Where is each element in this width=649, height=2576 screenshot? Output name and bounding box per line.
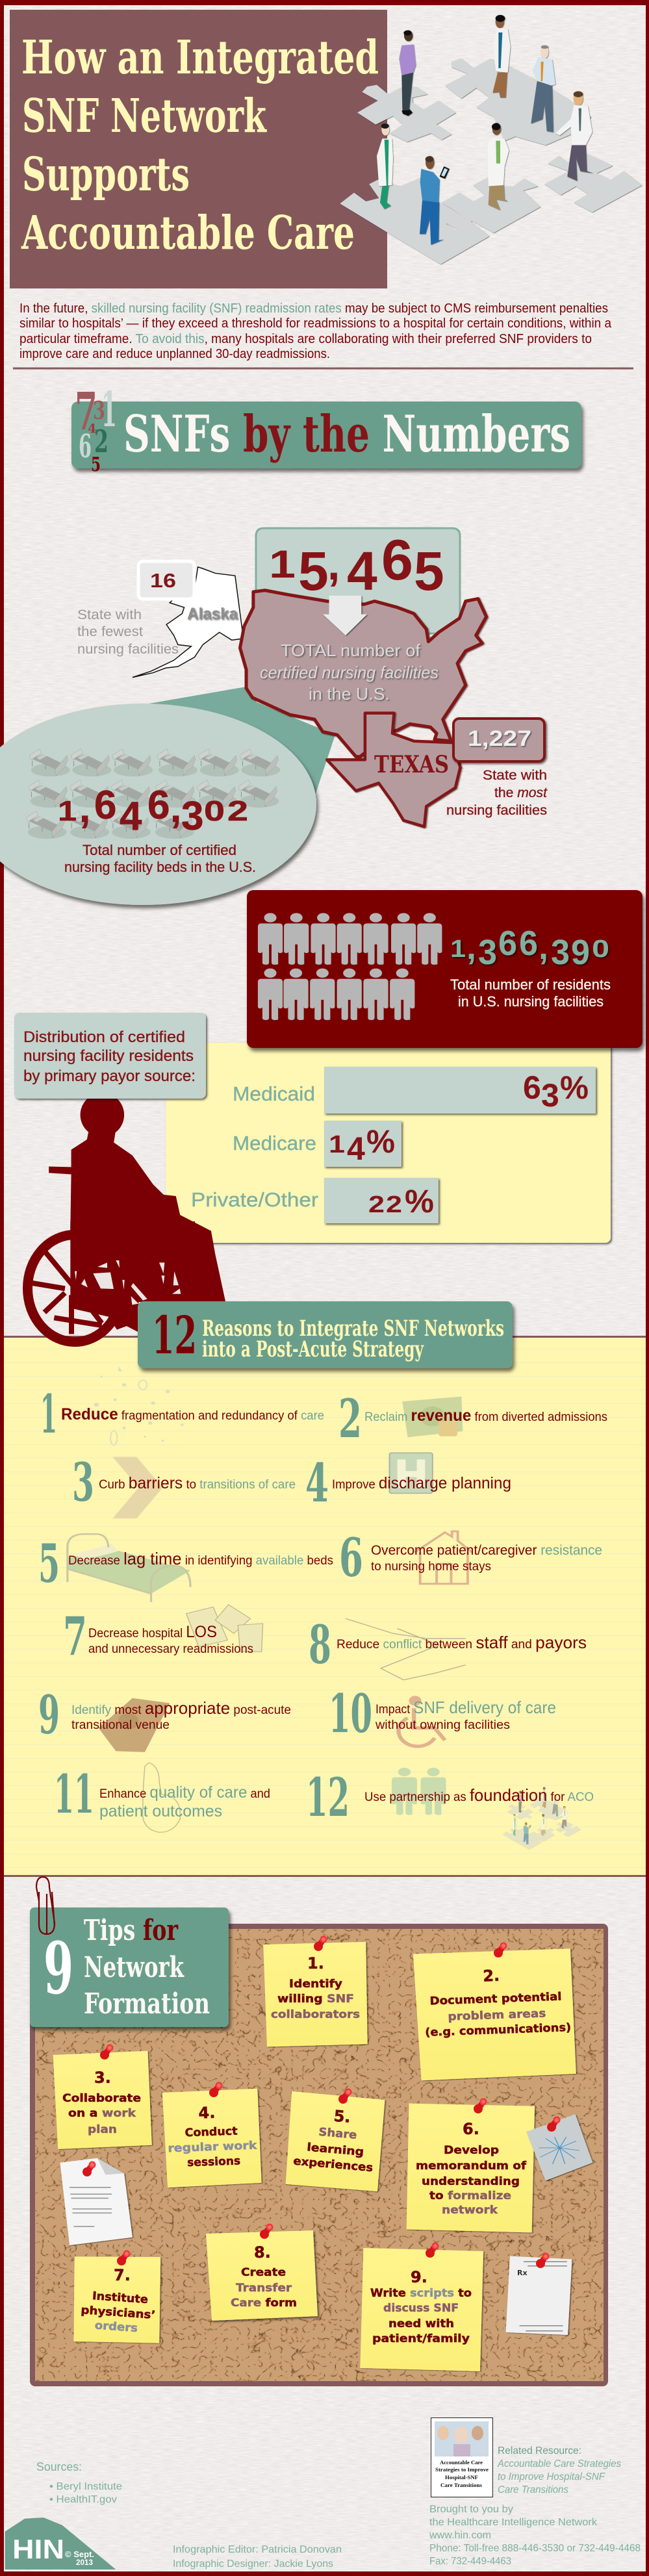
reasons text: Decrease hospital LOS (88, 1623, 217, 1641)
number: 1,646,302: 0 (204, 795, 225, 827)
bar chart: payor source: 4 (347, 1130, 365, 1167)
note 9 (360, 2243, 483, 2371)
note 7: physicians’ (81, 2304, 156, 2322)
note 3: on a work (68, 2107, 136, 2120)
reasons text: Enhance quality of care and (99, 1783, 270, 1802)
silhouette: patient in wheelchair (27, 1093, 225, 1342)
note 3: plan (88, 2123, 117, 2136)
reasons text: Use partnership as foundation for ACO (364, 1785, 594, 1805)
reasons numerals: 8 (309, 1614, 331, 1676)
bar chart: payor source: 2 (386, 1191, 402, 1218)
text: total beds: nursing facility beds in the U.S. (64, 859, 256, 875)
note 6: network (442, 2204, 498, 2217)
heading: 9 Tips for Network Formation: Network (84, 1951, 185, 1984)
number: 1,366,390: 6 (519, 924, 538, 963)
Texas label: TEXAS (374, 751, 449, 778)
number: 1,646,302: 6 (147, 783, 170, 828)
Texas count badge (453, 719, 544, 761)
cork board (30, 1924, 608, 2386)
reasons numerals: 4 (305, 1453, 329, 1514)
note 9: patient/family (372, 2332, 470, 2345)
reasons numerals: 12 (306, 1767, 350, 1829)
contact block: www.hin.com (429, 2530, 491, 2541)
note: blue network diagram (526, 2114, 592, 2181)
related resource book cover: Accountable Care (440, 2460, 483, 2466)
contact block (429, 2504, 641, 2567)
heading: SNFs by the Numbers: 1 (101, 382, 117, 438)
callout: distribution label: by primary payor source: (23, 1067, 196, 1085)
note 1: 1. (307, 1954, 324, 1972)
reasons numerals: 6 (339, 1527, 363, 1589)
text: total residents: Total number of residents (450, 976, 611, 993)
number: 15,465: 1 (269, 542, 296, 586)
HIN logo: 2013 (76, 2558, 93, 2567)
note 6: to formalize (429, 2189, 511, 2202)
icon: two people (392, 1768, 446, 1815)
note 2: problem areas (448, 2007, 546, 2024)
number: 1,646,302: 3 (181, 794, 203, 839)
bar chart: payor source: 3 (541, 1077, 559, 1114)
note 4: regular work (168, 2139, 257, 2155)
related resource book cover: Strategies to Improve (435, 2467, 489, 2473)
intro text: particular timeframe. To avoid this, many hospitals are collaborating with their preferred SNF providers to (19, 332, 592, 346)
arrow down (323, 596, 367, 635)
bar chart: payor source: 1 (329, 1131, 345, 1158)
number: 1,646,302: 4 (120, 794, 142, 839)
heading: 9 Tips for Network Formation: 9 (44, 1926, 73, 2010)
note 6: understanding (422, 2175, 520, 2188)
reasons text: Identify most appropriate post-acute (71, 1698, 291, 1718)
text: total beds: Total number of certified (83, 842, 236, 858)
text: total beds (64, 842, 256, 875)
note: prescription pad (506, 2253, 572, 2335)
bar chart: payor source: % (405, 1183, 434, 1219)
reasons text: Decrease lag time in identifying available beds (68, 1549, 333, 1568)
reasons numerals: 5 (38, 1533, 60, 1595)
decorative numerals (75, 381, 117, 476)
bar chart: payor source: 6 (523, 1069, 541, 1106)
HIN logo: © Sept. (65, 2549, 94, 2559)
reasons numerals: 11 (54, 1764, 94, 1826)
title (21, 30, 379, 260)
reasons numerals: 10 (329, 1683, 372, 1745)
reasons text: transitional venue (71, 1718, 170, 1732)
note 2: Document potential (429, 1991, 562, 2008)
icon: house (414, 1531, 472, 1584)
note 8: Care form (231, 2297, 297, 2310)
note 6: Develop (444, 2144, 499, 2157)
note 1: Identify (289, 1978, 342, 1991)
reasons text: Improve discharge planning (332, 1474, 511, 1492)
wedge connecting map to bed callout (149, 687, 335, 797)
reasons text: to nursing home stays (371, 1560, 491, 1574)
heading: SNFs by the Numbers (71, 381, 581, 476)
map caption: TOTAL number of (281, 641, 421, 660)
sources: • Beryl Institute (49, 2481, 122, 2492)
USA map (240, 591, 487, 757)
Texas count badge: 1,227 (468, 726, 531, 751)
text: state with fewest (77, 607, 179, 657)
text: state with most: State with (483, 768, 547, 783)
HIN logo: HIN (12, 2534, 64, 2564)
related resource text: to Improve Hospital-SNF (498, 2471, 605, 2482)
related resource text: Accountable Care Strategies (497, 2458, 621, 2469)
note 2: (e.g. communications) (425, 2021, 572, 2039)
note 7: 7. (114, 2266, 131, 2284)
note 6: 6. (463, 2120, 479, 2138)
number: 1,646,302: 2 (227, 795, 248, 827)
intro text: similar to hospitals’ — if they exceed a threshold for readmissions to a hospital for certain conditions, within a (19, 316, 612, 331)
bar chart: payor source (191, 1067, 596, 1223)
note 8: 8. (254, 2243, 271, 2262)
Alaska count badge (138, 561, 194, 599)
number: 15,465: 4 (347, 541, 377, 602)
reasons text: and unnecessary readmissions (88, 1642, 253, 1656)
contact block: the Healthcare Intelligence Network (429, 2517, 598, 2528)
contact block: Fax: 732-449-4463 (429, 2556, 511, 2567)
sources (36, 2460, 122, 2505)
callout: distribution label (14, 1013, 206, 1099)
map caption: in the U.S. (309, 684, 390, 704)
Alaska map (133, 567, 244, 678)
note 8: Create (241, 2266, 286, 2279)
icon: thumbs up (142, 1763, 180, 1832)
number: 1,646,302: , (170, 786, 181, 831)
contact block: Phone: Toll-free 888-446-3530 or 732-449-4468 (429, 2543, 641, 2554)
heading: 9 Tips for Network Formation (30, 1907, 229, 2027)
icon: hospital bed (68, 1534, 190, 1602)
note 4: Conduct (185, 2125, 238, 2139)
decorative numerals: 5 (91, 453, 101, 476)
bar chart: payor source: Medicare (233, 1132, 316, 1154)
decorative numerals: 2 (94, 424, 108, 460)
reasons numerals: 9 (38, 1685, 60, 1746)
bed icons (26, 749, 280, 839)
icon: confetti fragments (94, 1367, 184, 1445)
illustration: care team standing on puzzle pieces (340, 15, 642, 264)
note 1 (263, 1936, 368, 2047)
number: 1,366,390: 9 (571, 933, 590, 972)
reasons text: Reduce fragmentation and redundancy of care (61, 1405, 324, 1423)
reasons text: Curb barriers to transitions of care (99, 1474, 296, 1492)
intro text: improve care and reduce unplanned 30-day readmissions. (19, 347, 330, 361)
bar chart: payor source: Private/Other (191, 1188, 318, 1211)
text: state with most: the most (494, 785, 548, 800)
number: 15,465: 6 (381, 528, 413, 592)
panel: total facilities callout (256, 528, 460, 633)
reasons text: Reduce conflict between staff and payors (337, 1633, 587, 1652)
note 5: experiences (293, 2155, 374, 2174)
number: 15,465: 5 (414, 541, 444, 602)
HIN logo (5, 2518, 116, 2570)
callout: distribution label: nursing facility residents (23, 1047, 194, 1065)
Alaska count badge: 16 (150, 569, 176, 592)
heading: SNFs by the Numbers: SNFs by the Numbers (123, 405, 570, 464)
icon: paperclip on tips heading (36, 1877, 55, 1934)
contact block: Brought to you by (429, 2504, 513, 2515)
sources: • HealthIT.gov (49, 2494, 117, 2505)
note 9: need with (388, 2317, 454, 2330)
note 4 (162, 2082, 262, 2187)
icon: handshake (346, 1618, 466, 1680)
map caption (260, 641, 439, 704)
note 3: Collaborate (62, 2092, 141, 2105)
heading: 12 Reasons (138, 1301, 513, 1368)
note 6 (407, 2098, 535, 2233)
people icons (258, 913, 442, 1020)
note 9: Write scripts to (370, 2287, 472, 2300)
related resource text: Care Transitions (498, 2484, 568, 2495)
decorative numerals: 6 (79, 427, 92, 465)
editor credits: Infographic Designer: Jackie Lyons (173, 2558, 333, 2570)
Alaska label: Alaska (187, 605, 238, 623)
number: 1,366,390: 0 (592, 936, 609, 963)
note: prescription pad: Rx (517, 2269, 528, 2277)
note 1: willing SNF (277, 1993, 354, 2006)
note 5: Share (318, 2126, 357, 2142)
text: total residents: in U.S. nursing facilities (458, 993, 604, 1010)
number: 1,646,302: , (79, 786, 90, 831)
note 2 (413, 1943, 576, 2080)
faint background icons for reasons (68, 1367, 472, 1832)
sources: Sources: (36, 2460, 82, 2473)
panel: certified beds callout (0, 704, 316, 905)
note 9: discuss SNF (383, 2302, 459, 2315)
heading: 9 Tips for Network Formation: Formation (84, 1987, 210, 2021)
icon: hospital sign (390, 1453, 433, 1493)
map caption: certified nursing facilities (260, 663, 439, 682)
note 8 (206, 2223, 318, 2321)
title: Supports (22, 147, 190, 201)
reasons numerals: 7 (63, 1606, 87, 1668)
reasons text: without owning facilities (375, 1718, 510, 1732)
note 7: orders (94, 2319, 138, 2335)
note 4: 4. (198, 2104, 216, 2123)
text: state with fewest: the fewest (77, 624, 143, 639)
heading: 12 Reasons: Reasons to Integrate SNF Networks (202, 1316, 504, 1342)
note 2: 2. (483, 1967, 500, 1985)
number: 1,646,302: 6 (94, 783, 116, 828)
note 5 (286, 2088, 385, 2191)
note 9: 9. (411, 2268, 427, 2286)
bar chart: payor source: Medicaid (233, 1082, 315, 1105)
Texas map (327, 713, 460, 826)
heading: 12 Reasons: 12 (152, 1305, 197, 1366)
icon: money and coins (402, 1396, 463, 1437)
icon: calendar pages (186, 1605, 263, 1651)
number: 1,366,390: 3 (478, 933, 497, 972)
text: state with most: nursing facilities (446, 803, 547, 818)
reasons numerals: 3 (72, 1452, 94, 1514)
intro text (19, 301, 612, 361)
reasons numerals: 2 (338, 1388, 362, 1450)
title: How an Integrated (21, 30, 379, 84)
heading: 9 Tips for Network Formation: Tips for (84, 1914, 179, 1947)
icon: wheelchair symbol (398, 1698, 445, 1746)
number: 15,465: 5 (298, 541, 329, 602)
editor credits: Infographic Editor: Patricia Donovan (173, 2544, 342, 2555)
reasons text: Overcome patient/caregiver resistance (371, 1543, 602, 1558)
note 4: sessions (187, 2154, 240, 2169)
decorative numerals: 4 (88, 422, 96, 436)
related resource text (497, 2445, 621, 2495)
title: SNF Network (22, 88, 267, 143)
number: 1,366,390: 3 (551, 933, 570, 972)
heading: 12 Reasons: into a Post-Acute Strategy (202, 1336, 424, 1362)
note: work plan document (60, 2158, 133, 2245)
intro text: In the future, skilled nursing facility (SNF) readmission rates may be subject to CMS reimbursement penalties (19, 301, 608, 316)
panel: residents (247, 890, 643, 1048)
reasons text: patient outcomes (99, 1802, 222, 1820)
note 5: 5. (333, 2107, 351, 2126)
lined reasons panel (4, 1336, 646, 1877)
related resource book cover: Hospital-SNF (445, 2475, 478, 2480)
number: 1,366,390: , (539, 928, 548, 967)
note 8: Transfer (236, 2282, 292, 2295)
reasons numerals (38, 1384, 372, 1829)
panel: payor distribution (166, 1043, 611, 1243)
text: state with fewest: State with (77, 607, 142, 622)
related resource book cover (431, 2418, 492, 2497)
bar chart: payor source: % (366, 1123, 395, 1160)
decorative numerals: 3 (93, 396, 105, 425)
number: 1,646,302: 1 (58, 795, 77, 827)
icon: mini puzzle (503, 1787, 581, 1850)
decorative numerals: 7 (75, 381, 97, 442)
text: state with fewest: nursing facilities (77, 642, 179, 657)
reasons text: Reclaim revenue from diverted admissions (364, 1407, 607, 1425)
note 7 (73, 2251, 160, 2343)
icon: money folder (99, 1698, 170, 1752)
number: 1,366,390: , (466, 928, 476, 967)
note 3: 3. (94, 2069, 111, 2087)
note 6: memorandum of (416, 2160, 527, 2173)
related resource book cover: Care Transitions (440, 2482, 482, 2488)
callout: distribution label: Distribution of certified (23, 1028, 185, 1046)
title panel (10, 10, 387, 288)
icon: chevron (112, 1457, 162, 1518)
note 5: learning (307, 2141, 364, 2159)
number: 1,366,390: 1 (450, 936, 466, 963)
editor credits (173, 2544, 342, 2570)
bar chart: payor source: % (560, 1069, 589, 1106)
number: 1,366,390: 6 (498, 924, 517, 963)
title: Accountable Care (21, 205, 355, 260)
text: total residents (450, 976, 611, 1010)
reasons numerals: 1 (40, 1384, 57, 1446)
tips sticky notes (53, 1936, 592, 2371)
bar chart: payor source: 2 (368, 1191, 385, 1218)
related resource text: Related Resource: (498, 2445, 581, 2456)
note 3 (53, 2044, 152, 2149)
reasons text: Impact SNF delivery of care (375, 1698, 556, 1717)
number: 15,465: , (327, 539, 340, 589)
note 1: collaborators (271, 2008, 360, 2021)
note 7: Institute (92, 2289, 149, 2306)
reasons text (61, 1405, 607, 1820)
text: state with most (446, 768, 548, 818)
